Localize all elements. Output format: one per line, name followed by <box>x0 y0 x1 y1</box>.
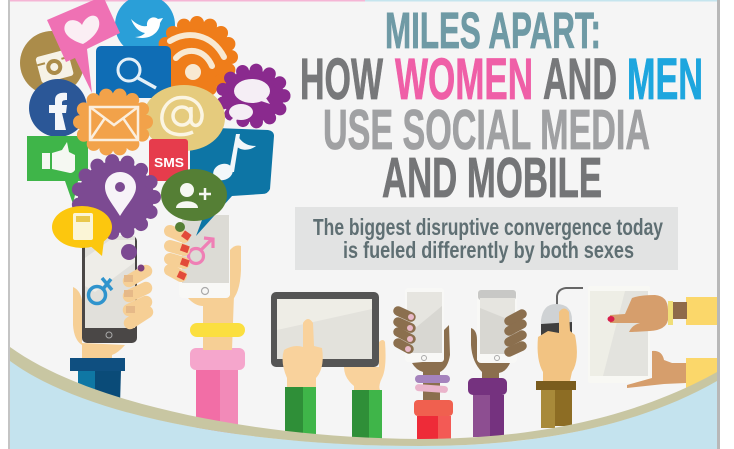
sleeve: purple <box>468 378 507 437</box>
sleeve: navy <box>70 358 125 405</box>
yellow sleeves <box>686 297 717 388</box>
phone <box>179 215 230 298</box>
fingers with red nails <box>170 231 184 276</box>
sleeve: olive <box>536 381 576 428</box>
green sleeves <box>285 387 382 443</box>
left hand pointing <box>283 319 323 387</box>
fingers <box>509 314 522 352</box>
icon: chat bubbles <box>222 70 284 122</box>
wrist and thumb <box>412 325 450 400</box>
title line: how women and men: AND <box>543 47 617 112</box>
title line: how women and men: HOW <box>300 47 383 112</box>
icon: add user <box>161 169 227 221</box>
left phone with hand and navy sleeve <box>70 236 147 405</box>
social media icon cluster <box>20 0 284 260</box>
lower hand <box>627 351 686 388</box>
sleeve: pink <box>190 348 245 434</box>
wrist and thumb <box>471 328 510 378</box>
bangles <box>415 375 450 393</box>
bangle <box>190 323 245 337</box>
icon: rss feed <box>163 23 231 91</box>
icon: facebook <box>29 79 87 137</box>
tablet <box>588 286 650 383</box>
sleeve: red <box>414 400 453 442</box>
mouse cable <box>557 288 583 306</box>
icon: instagram <box>20 31 84 95</box>
icon: sms: SMS <box>154 155 184 170</box>
icon: location pin <box>78 161 154 260</box>
upper hand pointing <box>610 295 668 332</box>
icon: twitter <box>115 0 175 55</box>
icon: thumbs up <box>27 136 88 204</box>
subtitle box <box>295 207 678 270</box>
title line: miles apart: MILES APART: <box>385 2 601 59</box>
fourth phone with brown hand and purple sleeve <box>468 290 522 437</box>
third phone with brown hand and red sleeve <box>398 288 453 442</box>
icon: female and male symbol <box>183 238 213 266</box>
bracelet and wrist <box>668 301 687 325</box>
wrist and palm <box>188 295 234 350</box>
title line: how women and men <box>300 47 703 112</box>
phone <box>405 288 444 362</box>
title line: and mobile: AND MOBILE <box>382 146 602 210</box>
icon: envelope <box>80 95 146 149</box>
bottom curved water band <box>10 347 717 449</box>
icon: search <box>96 46 171 98</box>
phone <box>477 290 517 363</box>
mouse with hand and olive sleeve <box>536 288 583 428</box>
icon: at sign <box>143 85 225 151</box>
subtitle box: is fueled differently by both sexes <box>343 237 634 263</box>
tablet with two hands and green sleeves <box>271 292 386 443</box>
right hand <box>344 340 386 390</box>
icon: heart tag <box>47 0 120 93</box>
icon: music note <box>190 127 274 236</box>
red nail <box>608 316 614 322</box>
phone <box>82 236 137 343</box>
thumb <box>230 246 241 302</box>
tablet <box>271 292 379 367</box>
fingers <box>129 271 147 323</box>
large tablet with two hands and yellow sleeves <box>588 286 717 388</box>
hand and thumb <box>73 287 125 358</box>
icon: sms <box>149 139 188 181</box>
centre phone with hand and pink sleeve <box>170 215 245 434</box>
title line: how women and men: WOMEN <box>395 47 533 112</box>
mouse body <box>541 304 572 335</box>
title <box>300 2 703 210</box>
fingers <box>398 311 411 349</box>
hand <box>538 308 577 381</box>
icon: calculator bubble <box>52 206 112 256</box>
icon: male symbol <box>88 278 112 304</box>
